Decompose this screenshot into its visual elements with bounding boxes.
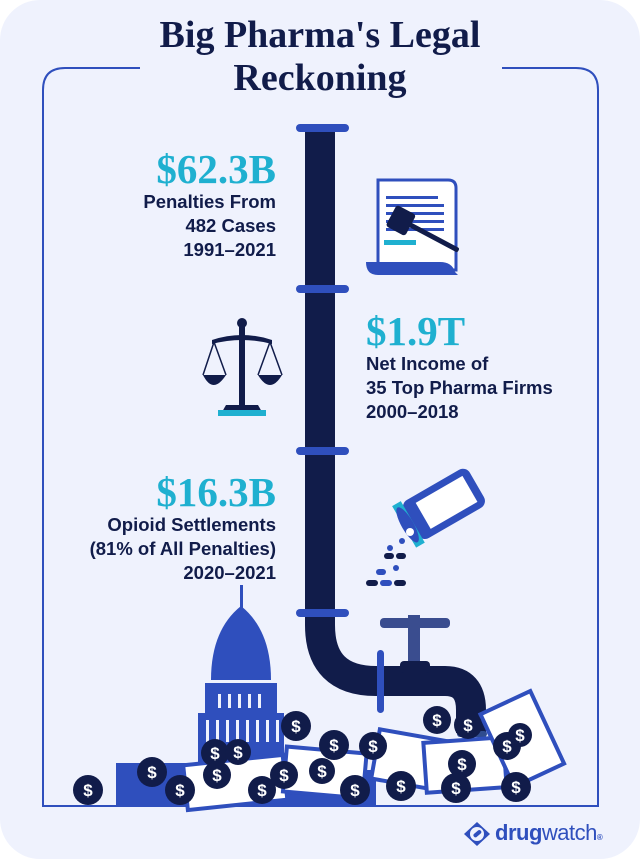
money pile: $	[317, 762, 327, 781]
stat: opioid: 2020–2021	[183, 562, 276, 583]
title: Reckoning	[233, 57, 407, 99]
money pile	[73, 691, 564, 810]
money pile: $	[432, 711, 442, 730]
money pile: $	[511, 778, 521, 797]
capitol building	[116, 585, 376, 807]
stat: penalties: 1991–2021	[183, 239, 276, 260]
money pile: $	[463, 716, 473, 735]
stat: net income: Net Income of	[366, 353, 488, 374]
logo: drugwatch: drugwatch®	[495, 820, 602, 845]
stat: penalties: $62.3B	[156, 146, 276, 192]
stat: opioid: (81% of All Penalties)	[90, 538, 276, 559]
money pile: $	[457, 755, 467, 774]
money pile: $	[147, 763, 157, 782]
money pile: $	[350, 781, 360, 800]
money pile: $	[279, 766, 289, 785]
money pile: $	[210, 744, 220, 763]
title	[160, 14, 480, 99]
money pile: $	[257, 781, 267, 800]
stat: penalties	[143, 146, 276, 260]
pipe	[296, 124, 487, 737]
money pile: $	[329, 736, 339, 755]
title: Big Pharma's Legal	[160, 14, 480, 56]
money pile: $	[396, 777, 406, 796]
money pile: $	[502, 737, 512, 756]
money pile: $	[212, 766, 222, 785]
stat: penalties: 482 Cases	[185, 215, 276, 236]
stat: penalties: Penalties From	[143, 191, 276, 212]
icon: scales	[203, 318, 282, 416]
stat: net income: $1.9T	[366, 308, 465, 354]
stat: net income: 35 Top Pharma Firms	[366, 377, 553, 398]
icon: document with gavel	[366, 180, 464, 275]
stat: opioid: $16.3B	[156, 469, 276, 515]
money pile: $	[175, 781, 185, 800]
stat: opioid	[90, 469, 276, 583]
money pile: $	[515, 726, 525, 745]
money pile: $	[451, 779, 461, 798]
stat: net income	[366, 308, 553, 422]
money pile: $	[83, 781, 93, 800]
stat: opioid: Opioid Settlements	[107, 514, 276, 535]
icon: pill bottle	[366, 464, 489, 586]
stat: net income: 2000–2018	[366, 401, 459, 422]
money pile: $	[368, 737, 378, 756]
money pile: $	[291, 717, 301, 736]
money pile: $	[233, 743, 243, 762]
